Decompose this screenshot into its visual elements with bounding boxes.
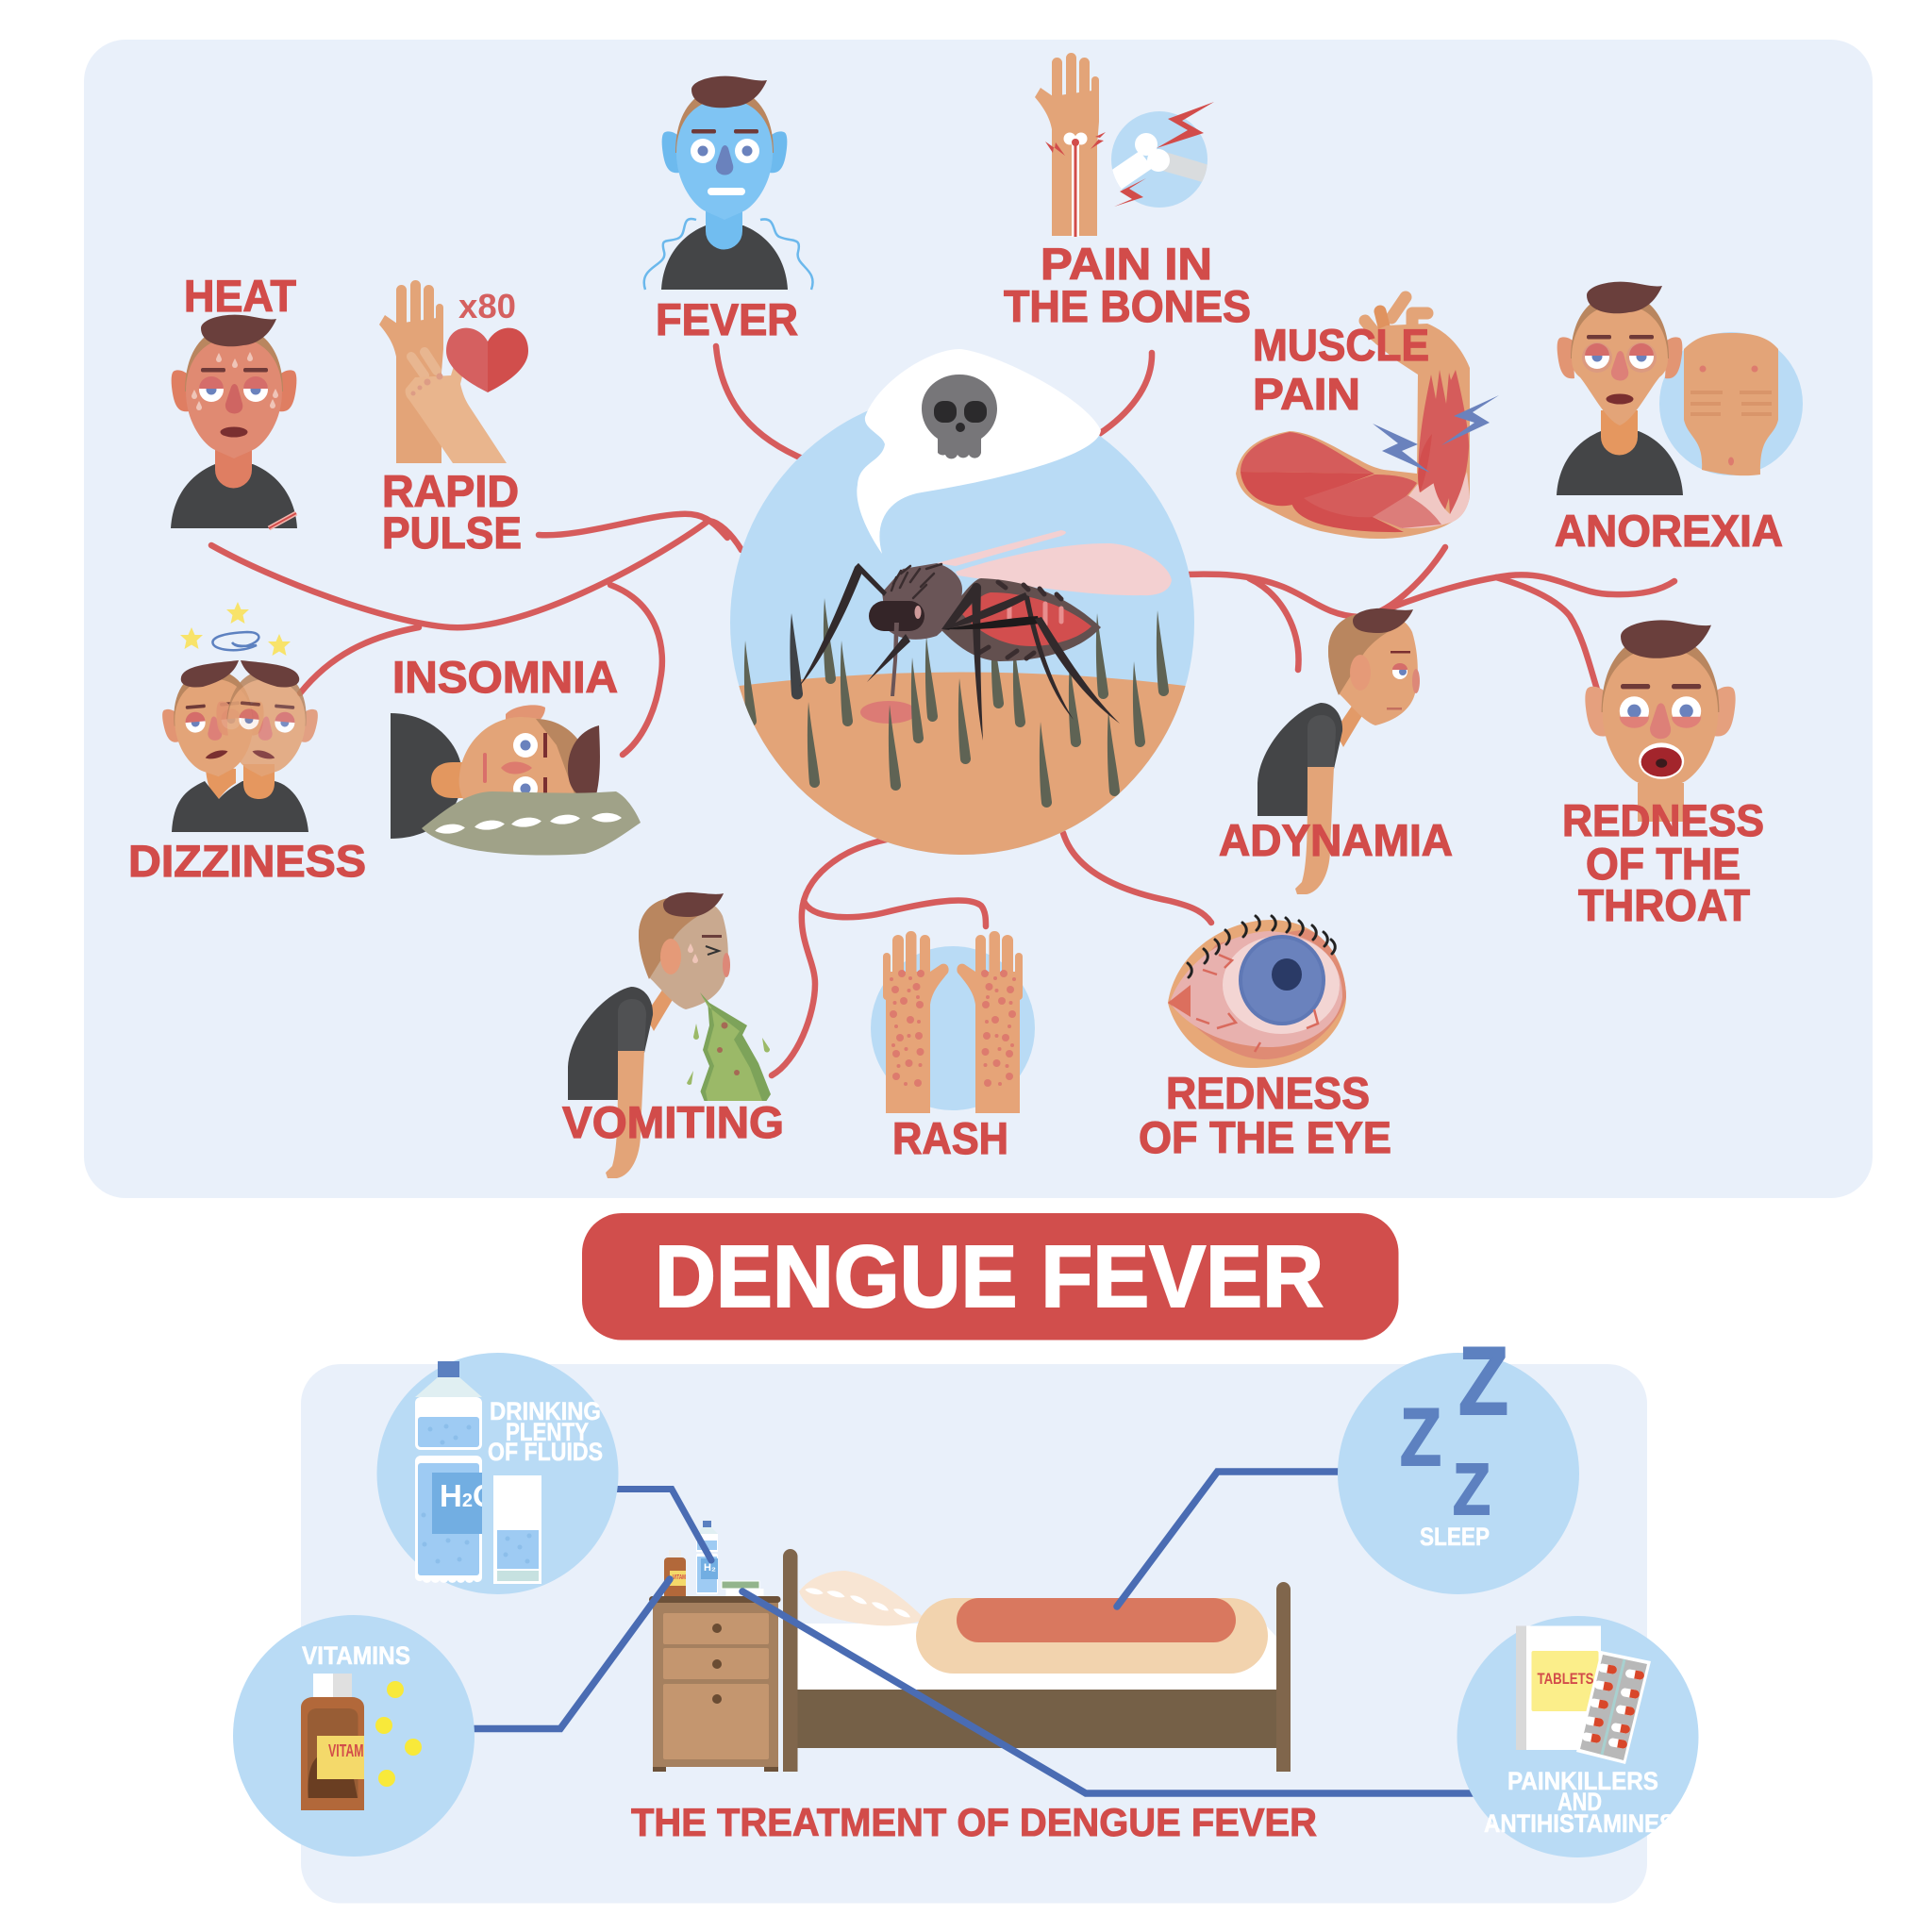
symptom: insomnia xyxy=(391,652,641,856)
symptom: muscle pain xyxy=(1236,297,1499,539)
hair xyxy=(181,660,239,688)
connector lines: treatment xyxy=(462,1472,1486,1793)
bent figure xyxy=(568,892,730,1178)
treatment circle: vitamins xyxy=(233,1615,475,1857)
mini vitamin bottle xyxy=(664,1550,686,1596)
symptom: vomiting xyxy=(562,892,784,1178)
anorexia head xyxy=(1557,282,1683,495)
symptom: adynamia xyxy=(1219,608,1453,894)
water bottle: H2O xyxy=(440,1478,497,1513)
mosquito wings xyxy=(937,530,1066,566)
stars and spiral xyxy=(226,602,249,624)
title banner xyxy=(582,1213,1398,1340)
eyelashes xyxy=(1188,916,1335,977)
hand with pulse xyxy=(379,280,443,463)
treatment circle: drinking fluids: OF FLUIDS xyxy=(488,1438,603,1466)
lying head xyxy=(506,705,545,724)
redness of the throat label: REDNESS xyxy=(1562,795,1764,845)
redness of the eye label: REDNESS xyxy=(1166,1068,1370,1118)
hairs on skin xyxy=(744,598,1169,808)
tablets box xyxy=(1516,1626,1601,1750)
mattress xyxy=(797,1624,1276,1690)
treatment circle: sleep: Z xyxy=(1400,1392,1441,1483)
treatment circle: drinking fluids xyxy=(377,1353,619,1594)
z letters: Z xyxy=(1458,1327,1508,1435)
panel: treatment background xyxy=(301,1364,1647,1904)
vomit stream xyxy=(700,992,771,1101)
anorexia label: ANOREXIA xyxy=(1555,506,1783,556)
vitamin bottle: VITAMIN xyxy=(328,1741,375,1760)
symptom: redness of the throat: THROAT xyxy=(1578,880,1750,930)
symptom: redness of the throat xyxy=(1562,620,1764,930)
symptom: heat xyxy=(171,271,297,528)
tear duct xyxy=(1168,985,1191,1017)
mosquito thorax xyxy=(882,563,962,640)
arm fingers xyxy=(1365,297,1427,340)
mosquito head xyxy=(869,601,924,631)
water bottle xyxy=(415,1361,482,1583)
heart icon xyxy=(446,328,488,392)
pulse rate: x80 xyxy=(458,287,516,325)
right head xyxy=(211,666,322,781)
treatment circle: drinking fluids: PLENTY xyxy=(506,1418,589,1446)
muscle pain label: MUSCLE xyxy=(1253,320,1429,370)
torso circle xyxy=(1659,332,1803,475)
fever label: FEVER xyxy=(656,294,798,344)
tablets box: TABLETS xyxy=(1538,1670,1594,1688)
skull icon xyxy=(922,375,997,458)
dizziness label: DIZZINESS xyxy=(128,836,366,886)
vitamin bottle xyxy=(301,1674,364,1810)
frame xyxy=(797,1690,1276,1748)
pillow xyxy=(422,791,641,856)
necks xyxy=(206,764,236,799)
bone circle xyxy=(1111,111,1208,208)
vitamins label: VITAMINS xyxy=(302,1641,410,1670)
insomnia label: INSOMNIA xyxy=(392,652,618,702)
heat label: HEAT xyxy=(184,271,296,321)
shoulders xyxy=(172,781,308,832)
lightning: muscle pain xyxy=(1441,395,1499,445)
adynamia label: ADYNAMIA xyxy=(1219,815,1453,865)
nightstand xyxy=(649,1521,781,1772)
vitamin pills xyxy=(375,1681,422,1787)
symptom: rapid pulse: PULSE xyxy=(382,508,522,558)
bite mark xyxy=(860,701,917,724)
vomiting label: VOMITING xyxy=(562,1097,784,1147)
symptom: redness of the throat: OF THE xyxy=(1586,839,1740,889)
symptom: muscle pain: PAIN xyxy=(1253,369,1360,419)
veins xyxy=(1196,955,1318,1052)
treatment circle: sleep: Z xyxy=(1453,1449,1491,1530)
arm with bone xyxy=(1035,53,1099,236)
mini tablets xyxy=(722,1581,764,1596)
bed xyxy=(783,1549,1291,1772)
arm muscles xyxy=(1401,472,1470,528)
pain in the bones label: PAIN IN xyxy=(1041,239,1212,289)
sleep label: SLEEP xyxy=(1420,1523,1490,1551)
symptom: fever xyxy=(644,76,813,344)
mosquito abdomen xyxy=(941,578,1101,661)
title: DENGUE FEVER xyxy=(655,1227,1324,1325)
treatment caption: THE TREATMENT OF DENGUE FEVER xyxy=(631,1800,1317,1844)
left head xyxy=(158,666,269,781)
symptom: pain in the bones: THE BONES xyxy=(1004,281,1251,331)
patient body xyxy=(957,1598,1236,1642)
skin ground xyxy=(739,672,1186,855)
symptom: redness of the eye: OF THE EYE xyxy=(1139,1112,1391,1162)
left hand xyxy=(883,931,949,1113)
treatment circle: painkillers: AND xyxy=(1557,1788,1602,1816)
mosquito legs xyxy=(799,563,1120,741)
treatment circle: sleep xyxy=(1338,1327,1579,1594)
panel: symptoms background xyxy=(84,40,1873,1198)
connector lines: symptoms xyxy=(211,346,1674,1075)
rash label: RASH xyxy=(892,1113,1008,1163)
symptom: redness of the eye xyxy=(1139,916,1391,1162)
central illustration: mosquito on skin xyxy=(717,349,1208,868)
symptom: rash xyxy=(871,931,1035,1163)
symptom: dizziness xyxy=(128,602,366,886)
mini water bottle: H₂ xyxy=(704,1562,716,1574)
iris xyxy=(1239,935,1325,1025)
flexed arm xyxy=(1236,324,1470,539)
rapid pulse label: RAPID xyxy=(382,466,519,516)
sclera xyxy=(1170,931,1342,1047)
sky circle xyxy=(730,391,1194,855)
slumped figure xyxy=(1257,608,1420,894)
speech bubble xyxy=(857,349,1101,554)
lightning: pain xyxy=(1157,102,1214,148)
treatment circle: painkillers xyxy=(1457,1616,1698,1857)
proboscis xyxy=(891,623,899,696)
blister pack xyxy=(1576,1651,1651,1764)
mini vitamin bottle: VITAM xyxy=(673,1574,686,1581)
water glass xyxy=(493,1475,541,1584)
treatment circle: painkillers: ANTIHISTAMINES xyxy=(1484,1809,1674,1838)
mini water bottle xyxy=(696,1521,718,1594)
lying body xyxy=(391,713,462,839)
drinking label: DRINKING xyxy=(490,1397,601,1425)
symptom: pain in the bones xyxy=(1004,53,1251,331)
symptom: anorexia xyxy=(1555,282,1803,556)
blanket xyxy=(916,1598,1268,1674)
eye outer xyxy=(1168,920,1346,1068)
pillow xyxy=(799,1571,925,1625)
rash backdrop circle xyxy=(871,946,1035,1110)
symptom: rapid pulse xyxy=(379,280,528,558)
painkillers label: PAINKILLERS xyxy=(1507,1767,1658,1795)
right hand xyxy=(957,931,1023,1113)
